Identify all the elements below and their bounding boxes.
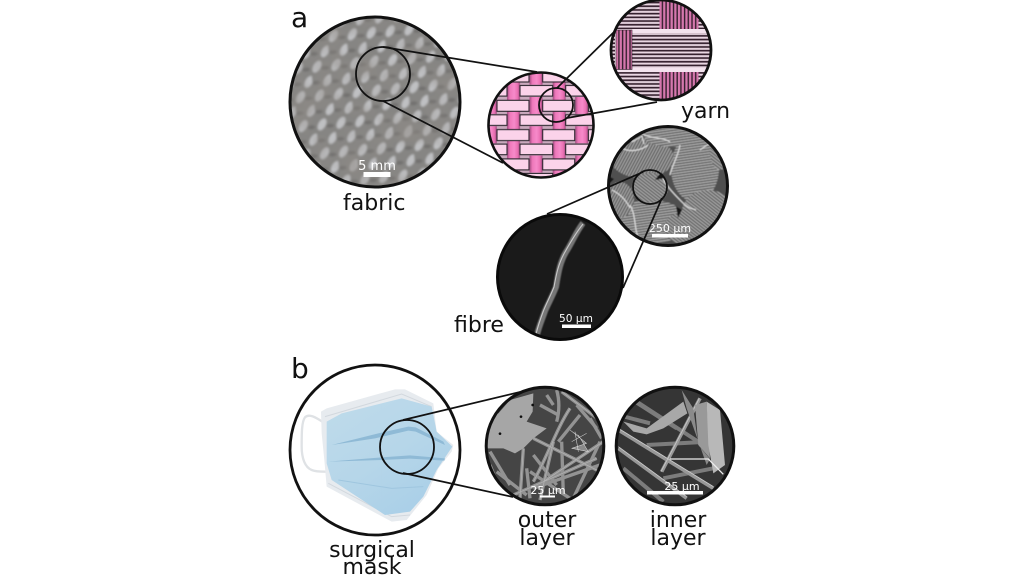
fabric label: fabric (343, 191, 405, 216)
outer layer label (518, 508, 577, 551)
figure: fabric and surgical mask structure (288, 0, 736, 574)
panel letter b: b (291, 352, 309, 385)
fibre label: fibre (454, 313, 504, 338)
mask border seams (325, 394, 432, 517)
panel letter a: a (291, 1, 308, 34)
inner layer label (650, 508, 707, 551)
inner layer SEM circle (613, 385, 737, 508)
connector lines fabric to weave (383, 47, 537, 163)
panel a: fabric hierarchy (280, 0, 734, 342)
fabric magnifier ring (356, 47, 410, 101)
inner layer scale bar: 25 µm (664, 480, 700, 493)
panel b: surgical mask (290, 352, 737, 576)
debris film (487, 393, 547, 453)
single fibre circle (495, 212, 625, 342)
inner layer label: layer (650, 526, 707, 551)
fibre scale bar: 50 µm (559, 313, 593, 325)
fabric photo circle (288, 16, 462, 188)
surgical mask label: surgical (329, 538, 415, 563)
mask border (321, 389, 453, 522)
mask blue body (327, 398, 452, 515)
mask pleats (328, 427, 445, 462)
weave magnifier ring (539, 88, 573, 122)
mask magnifier ring (380, 420, 434, 474)
SEM scale bar: 250 µm (649, 222, 691, 235)
SEM magnifier ring (633, 170, 667, 204)
yarn diagram circle (610, 0, 715, 102)
large flat fibres (623, 402, 687, 434)
outer layer label: outer (518, 508, 577, 533)
SEM fibres circle (605, 122, 734, 250)
surgical mask photo circle (290, 365, 460, 535)
outer layer SEM circle (485, 385, 608, 508)
fabric scale bar: 5 mm (358, 159, 396, 174)
woven diagram circle (485, 70, 597, 180)
connector lines SEM to fibre (547, 172, 662, 288)
ear loop (302, 416, 326, 472)
inner layer label: inner (650, 508, 707, 533)
inner layer scale bar (647, 480, 703, 494)
outer layer scale bar: 25 µm (530, 484, 566, 497)
connector lines weave to yarn (557, 30, 657, 118)
yarn label: yarn (681, 99, 730, 124)
surgical mask label (329, 538, 415, 576)
outer layer label: layer (519, 526, 576, 551)
connector lines mask to layers (403, 392, 520, 497)
